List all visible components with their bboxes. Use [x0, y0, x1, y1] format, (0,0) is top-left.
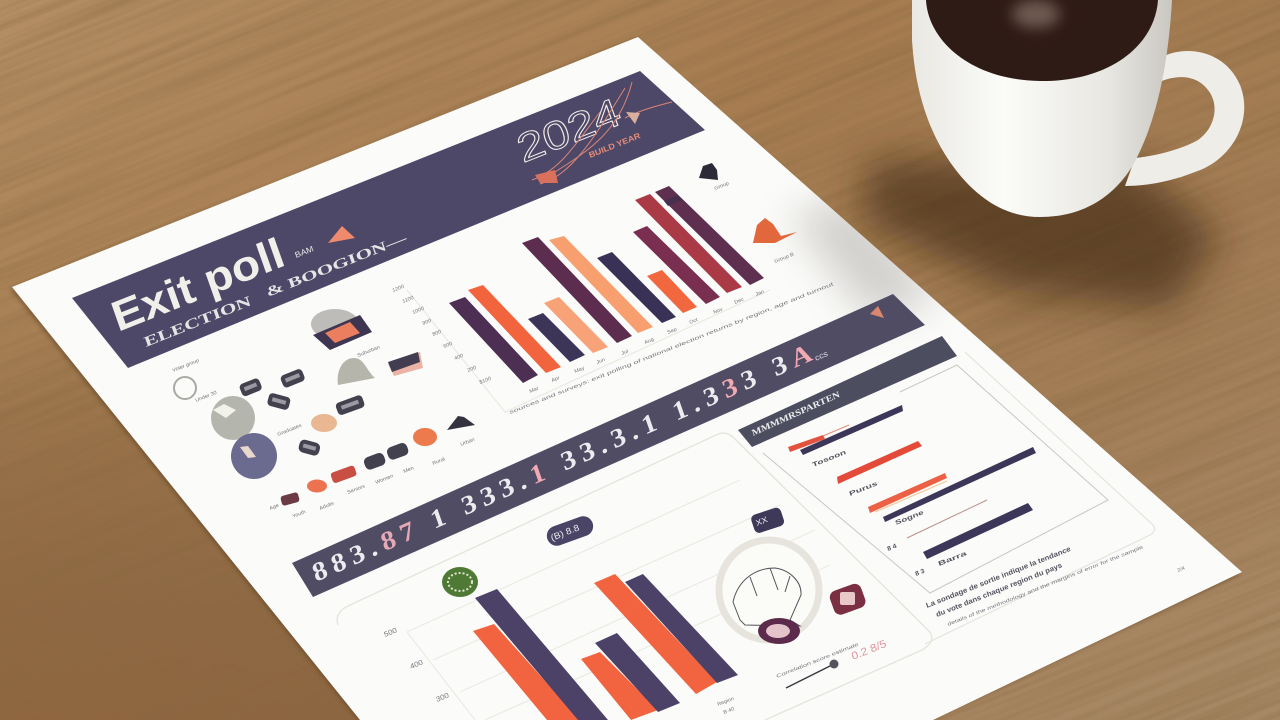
bar labels: Sogne	[894, 509, 925, 527]
icon labels: Seniors	[347, 483, 366, 496]
y axis labels: 1200	[392, 284, 405, 294]
icon: purple badge	[758, 618, 800, 644]
icon labels: Youth	[292, 509, 307, 520]
icon: peach figure	[311, 414, 337, 432]
x axis labels: Apr	[551, 375, 561, 384]
globe circle illustration	[719, 540, 819, 640]
y axis labels: 900	[422, 318, 432, 327]
middle band	[292, 294, 925, 597]
cup handle	[1125, 51, 1244, 186]
page number: 2/4	[1177, 566, 1186, 574]
slider	[786, 660, 838, 688]
year strap line: BUILD YEAR	[587, 130, 642, 160]
bar labels: Tosoon	[811, 449, 847, 469]
inner frame	[763, 365, 1108, 593]
x axis labels: May	[574, 365, 586, 375]
y axis labels: 400	[454, 353, 464, 362]
icon labels: Urban	[460, 437, 476, 448]
y axis labels: 200	[467, 365, 477, 374]
icon labels: Voter group	[172, 358, 200, 374]
panel outline	[337, 433, 932, 720]
icon: blue pie	[231, 433, 277, 479]
y axis labels: 600	[443, 341, 453, 350]
x axis labels: Oct	[689, 317, 699, 326]
outer frame	[925, 352, 1155, 644]
icon set: small dark chips	[238, 368, 410, 471]
icon labels	[172, 345, 476, 520]
y axis labels: 1000	[412, 306, 425, 316]
y axis labels: 800	[432, 329, 442, 338]
coffee	[926, 0, 1158, 81]
x axis labels: Mar	[529, 386, 540, 395]
paragraph block: La sondage de sortie indique la tendance	[925, 544, 1072, 610]
subtitle: ELECTION	[142, 293, 253, 351]
icon: outline circle	[174, 377, 196, 399]
chart panel outline	[407, 290, 770, 412]
x axis label	[717, 696, 735, 716]
icon: dark triangle figure	[447, 416, 475, 430]
panel: lower grouped bar chart	[337, 433, 932, 720]
x axis label: Region	[717, 696, 735, 708]
bar labels: 8 3	[914, 568, 926, 578]
panel header bar	[738, 336, 957, 447]
y axis labels: 1100	[402, 295, 415, 305]
chart footnote: sources and surveys: exit polling of national election returns by region, age and turnout	[509, 281, 835, 416]
icon: red chip	[330, 465, 357, 484]
legend icon: dark figure	[699, 163, 730, 192]
legend icon: dark figure: Group	[714, 181, 730, 192]
y axis labels: 400	[409, 658, 424, 671]
x axis labels: Jul	[621, 349, 629, 357]
icon: dark badge: XX	[754, 514, 769, 528]
cup body	[912, 0, 1172, 217]
header band	[72, 71, 705, 368]
title: Exit poll	[105, 229, 290, 341]
icon: orange figure	[413, 428, 437, 446]
icon: grey dome	[338, 358, 375, 385]
y axis labels	[383, 626, 450, 704]
bar labels: 8 4	[886, 543, 898, 553]
icon: orange oval	[307, 480, 327, 492]
band ornament	[870, 306, 884, 318]
icon: grey pie	[211, 396, 255, 440]
icon labels: Graduates	[277, 423, 303, 438]
icon labels: Adults	[319, 501, 335, 512]
icon labels: Under 30	[195, 390, 218, 404]
legend icon: orange figure	[753, 218, 797, 265]
y axis labels	[392, 284, 492, 386]
bars	[473, 574, 738, 720]
x axis labels: Sep	[667, 327, 678, 336]
x axis labels: Nov	[713, 307, 724, 316]
grid lines	[407, 480, 830, 720]
bar labels	[811, 449, 968, 578]
x axis labels: Dec	[734, 297, 745, 306]
margin value: 0.2 8/5	[850, 638, 888, 663]
x axis label: B 40	[723, 706, 735, 716]
year ornament	[532, 82, 672, 184]
year 2024: 2024	[511, 89, 626, 171]
icon: red badge	[828, 582, 867, 617]
panel: top bar chart	[392, 163, 835, 416]
panel header bar: MMMMRSPARTEN	[751, 390, 841, 439]
x axis labels: Aug	[644, 337, 655, 346]
header triangle icon	[328, 226, 355, 243]
subtitle continuation: & BOOGION—	[264, 230, 410, 301]
x axis labels: Jan	[755, 289, 765, 298]
cup shadow on table	[860, 160, 1220, 310]
y axis labels: 500	[383, 626, 398, 639]
coffee cup	[912, 0, 1244, 217]
icon: small chip	[280, 492, 300, 506]
panel: demographic icons	[172, 309, 476, 520]
icon: dark pill	[544, 513, 596, 549]
icon labels: Age	[269, 503, 280, 512]
icon labels: Rural	[432, 457, 446, 467]
y axis labels: $100	[479, 376, 492, 386]
icon: pink card	[388, 352, 423, 376]
bar labels: Barra	[937, 550, 968, 568]
icon: large badge	[311, 309, 372, 350]
bars	[449, 186, 764, 383]
steam	[1012, 0, 1060, 28]
y axis labels: 300	[435, 691, 450, 704]
icon: dark badge	[750, 506, 785, 534]
band figures: 883.87 1 333.1 33.3.1 1.333 3A	[308, 337, 816, 587]
icon: dark pill: (B) 8.8	[549, 523, 581, 544]
paragraph block: details of the methodology and the margins of error for the sample	[947, 545, 1144, 628]
icon: green globe	[442, 567, 478, 597]
bar labels: Purus	[848, 480, 879, 498]
icon labels: Suburban	[357, 345, 381, 359]
legend icon: orange figure: Group B	[774, 252, 795, 265]
slider caption: Correlation score estimate	[776, 642, 860, 680]
paragraph block	[925, 544, 1144, 628]
x axis labels: Jun	[596, 357, 606, 366]
small header label: BAM	[293, 244, 315, 260]
paragraph block: du vote dans chaque region du pays	[935, 561, 1063, 619]
cup shadow on paper	[790, 195, 940, 320]
icon labels: Women	[375, 473, 394, 486]
icon labels: Men	[403, 465, 415, 475]
x axis labels	[529, 289, 765, 395]
panel: horizontal bars	[738, 336, 1186, 644]
band end label: ccs	[813, 348, 829, 363]
horizontal bars	[788, 405, 1036, 559]
